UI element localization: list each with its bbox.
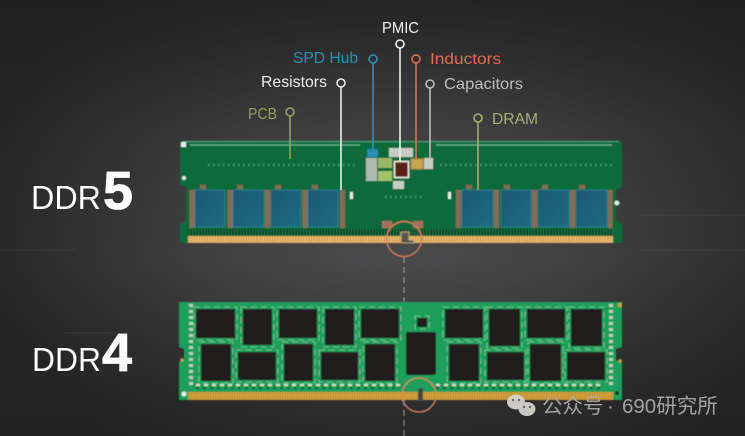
watermark text: 公众号 bbox=[542, 395, 604, 418]
label: PMIC bbox=[382, 20, 419, 161]
label: DRAM: DRAM bbox=[492, 111, 538, 128]
DDR4 gold fingers bbox=[188, 392, 613, 400]
DDR5 power management cluster bbox=[366, 148, 433, 189]
watermark text: · bbox=[607, 395, 614, 418]
DDR4 mounting holes bbox=[180, 303, 622, 396]
label: Capacitors bbox=[426, 76, 523, 158]
notch guide line bbox=[403, 257, 405, 302]
SPD hub chip bbox=[367, 149, 378, 157]
DDR5 small white parts bbox=[350, 192, 451, 199]
DDR4 key notch bbox=[418, 388, 423, 401]
DDR5 trace rows bbox=[208, 165, 612, 197]
DDR5 circuit board bbox=[180, 141, 622, 243]
label: Capacitors: Capacitors bbox=[444, 76, 523, 93]
DDR4 edge components bbox=[191, 304, 611, 388]
DDR4 notch circle bbox=[402, 378, 436, 412]
DDR4 guide line bbox=[403, 400, 405, 436]
DDR5 notch circle bbox=[386, 222, 422, 256]
label: Resistors bbox=[261, 74, 345, 190]
label: PMIC: PMIC bbox=[382, 20, 419, 37]
DDR5 gold fingers bbox=[188, 236, 613, 243]
heading: DDR5: DDR bbox=[31, 179, 101, 216]
DDR4 circuit board bbox=[179, 302, 622, 400]
heading: DDR5 bbox=[31, 161, 133, 221]
heading: DDR5: 5 bbox=[103, 161, 133, 221]
panel: DDR4 module bbox=[179, 302, 622, 436]
DDR4 component row bbox=[196, 385, 604, 388]
label: SPD Hub: SPD Hub bbox=[293, 50, 358, 67]
heading: DDR4: 4 bbox=[102, 323, 132, 383]
DDR5 key notch bbox=[401, 232, 414, 243]
icon: chat bubbles bbox=[507, 394, 536, 416]
watermark bbox=[507, 394, 718, 418]
capacitor chip bbox=[424, 158, 433, 169]
DDR5 mounting holes bbox=[181, 142, 620, 206]
lower capacitors bbox=[393, 181, 404, 189]
label: PCB: PCB bbox=[248, 106, 277, 123]
DDR5 resistor columns bbox=[190, 185, 612, 228]
label: Inductors bbox=[412, 51, 501, 159]
capacitor row bbox=[389, 148, 413, 157]
heading: DDR4 bbox=[32, 323, 132, 383]
label: Resistors: Resistors bbox=[261, 74, 327, 91]
DDR5 DRAM chips bbox=[195, 190, 607, 227]
label: Inductors: Inductors bbox=[430, 51, 501, 68]
PMIC chip bbox=[394, 162, 408, 178]
label: PCB bbox=[248, 106, 294, 159]
green inductor lower bbox=[378, 171, 392, 181]
background streaks bbox=[0, 215, 745, 333]
watermark text: 690研究所 bbox=[622, 395, 718, 418]
inductor chip bbox=[411, 159, 423, 169]
panel: DDR5 module bbox=[180, 141, 622, 256]
DDR5 board highlights bbox=[183, 142, 619, 145]
heading: DDR4: DDR bbox=[32, 341, 101, 378]
DDR4 memory chips bbox=[196, 309, 605, 381]
DDR4 chip outlines bbox=[194, 307, 607, 383]
green inductors bbox=[378, 158, 392, 168]
label: DRAM bbox=[474, 111, 538, 190]
label: SPD Hub bbox=[293, 50, 377, 149]
DDR5 pin teeth bbox=[188, 229, 613, 236]
resistor stack bbox=[366, 158, 377, 181]
